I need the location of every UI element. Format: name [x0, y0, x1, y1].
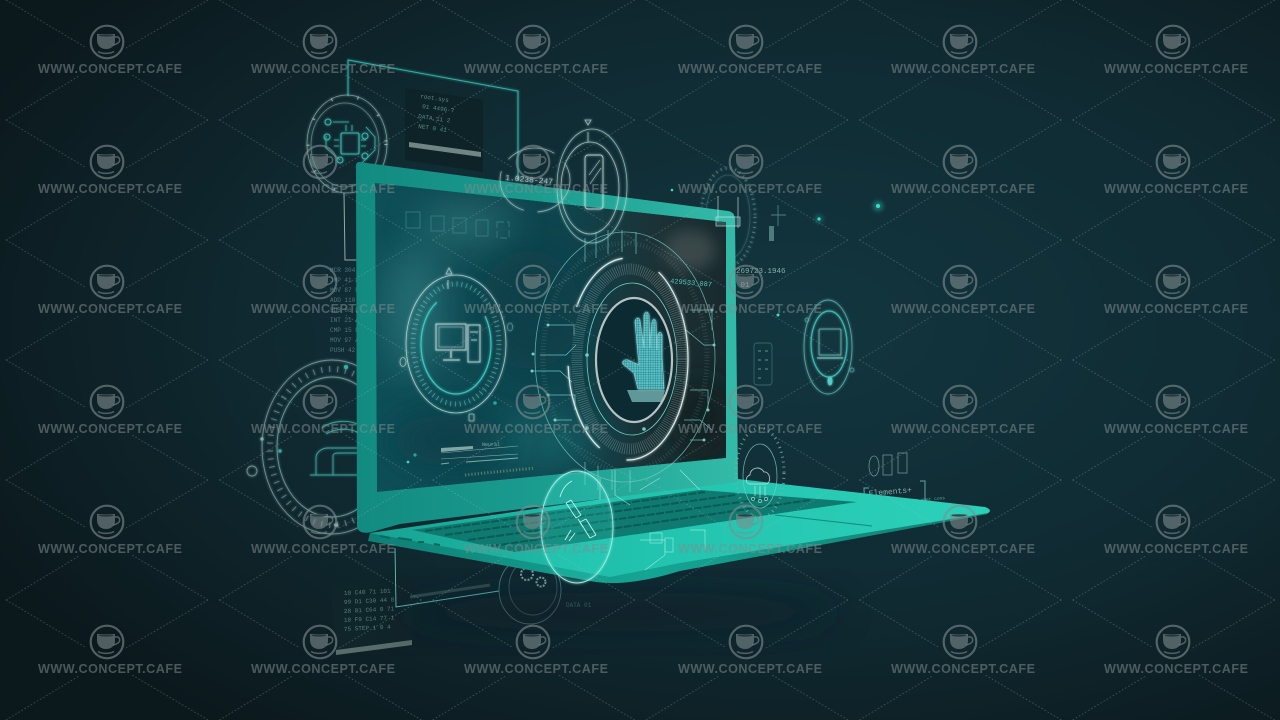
watermark grid: WWW.CONCEPT.CAFE — [38, 302, 182, 316]
watermark grid: WWW.CONCEPT.CAFE — [464, 62, 608, 76]
icon: floating plus and bar — [769, 205, 786, 241]
panel: lower code screen: 28 01 C64 0 71 — [344, 605, 395, 615]
watermark grid: WWW.CONCEPT.CAFE — [678, 182, 822, 196]
laptop — [356, 162, 990, 632]
icon: gears ring — [499, 556, 592, 624]
watermark grid: WWW.CONCEPT.CAFE — [1104, 182, 1248, 196]
laptop shadow — [400, 592, 840, 632]
trackpad line — [775, 515, 872, 526]
panel: top code screen: root.sys — [420, 93, 450, 104]
watermark grid: WWW.CONCEPT.CAFE — [678, 542, 822, 556]
watermark grid: WWW.CONCEPT.CAFE — [464, 542, 608, 556]
watermark grid: WWW.CONCEPT.CAFE — [38, 422, 182, 436]
text block: left code column: SUB 66 DX — [330, 307, 363, 314]
watermark grid: WWW.CONCEPT.CAFE — [891, 542, 1035, 556]
chart: progress bars on the screen — [407, 401, 535, 475]
text block: data readout: DATA 01 — [718, 282, 750, 290]
panel: lower code screen: 75 STEP 1 0 4 — [344, 624, 391, 633]
watermark grid: WWW.CONCEPT.CAFE — [251, 302, 395, 316]
watermark grid: WWW.CONCEPT.CAFE — [38, 662, 182, 676]
watermark grid: WWW.CONCEPT.CAFE — [38, 182, 182, 196]
watermark grid: WWW.CONCEPT.CAFE — [1104, 422, 1248, 436]
laptop base — [368, 479, 990, 583]
watermark grid: WWW.CONCEPT.CAFE — [891, 182, 1035, 196]
watermark grid: WWW.CONCEPT.CAFE — [251, 422, 395, 436]
panel: lower code screen: 99 D1 C30 44 8 — [344, 596, 395, 606]
text block: left code column: JMP 41 AL — [330, 277, 363, 284]
connector lines under the laptop — [395, 548, 499, 607]
watermark grid: WWW.CONCEPT.CAFE — [38, 62, 182, 76]
watermark grid: WWW.CONCEPT.CAFE — [891, 62, 1035, 76]
text block: elements card: Elements+ — [868, 486, 913, 499]
text block: left code column: MCR 304 — [330, 267, 356, 274]
glowing particles — [671, 189, 883, 316]
panel: top code screen: 01 4496 7 — [422, 103, 455, 115]
icon: scanned hand — [623, 312, 665, 402]
panel: top code screen — [348, 60, 518, 180]
watermark grid: WWW.CONCEPT.CAFE — [251, 62, 395, 76]
icon: keypad phone — [754, 343, 772, 385]
watermark grid: WWW.CONCEPT.CAFE — [1104, 542, 1248, 556]
watermark grid: WWW.CONCEPT.CAFE — [678, 422, 822, 436]
watermark grid: WWW.CONCEPT.CAFE — [464, 182, 608, 196]
watermark grid: WWW.CONCEPT.CAFE — [1104, 662, 1248, 676]
side ports — [380, 536, 440, 545]
panel: lower code screen: 10 C40 71 101 — [344, 588, 391, 597]
icon: cloud ring — [736, 428, 784, 518]
icon: router on the lid corner — [716, 196, 740, 228]
text block: hand scan code: 429533_087 — [670, 278, 712, 290]
icon row on the screen — [406, 212, 509, 238]
text block: left code column — [330, 267, 366, 354]
circuit traces on the keyboard — [600, 470, 705, 570]
watermark grid: WWW.CONCEPT.CAFE — [891, 422, 1035, 436]
icon: circuit chip ring — [307, 95, 387, 193]
chart: progress bars on the screen: Neural — [482, 442, 500, 448]
watermark grid: WWW.CONCEPT.CAFE — [464, 662, 608, 676]
icon: phone ring — [500, 120, 627, 243]
back HUD graphics behind the laptop — [247, 60, 945, 655]
text block: data readout: 847.269723.1946 — [718, 268, 786, 276]
icon: large left ring — [247, 360, 402, 534]
text block: elements card: Donec vitae mauris elit sed — [867, 502, 940, 514]
watermark grid: WWW.CONCEPT.CAFE — [678, 302, 822, 316]
watermark grid: WWW.CONCEPT.CAFE — [1104, 302, 1248, 316]
front HUD graphics on the screen — [400, 120, 784, 583]
panel: lower code screen — [331, 580, 415, 655]
text block: left code column: MOV 97 AH — [330, 337, 363, 344]
icon: outer circuit ring — [530, 230, 716, 492]
watermark grid: WWW.CONCEPT.CAFE — [251, 662, 395, 676]
white connector bracket — [344, 193, 358, 260]
icon: router ring top right — [701, 168, 755, 266]
text block: left code column: ADD 110 CL — [330, 297, 366, 304]
watermark grid: WWW.CONCEPT.CAFE — [251, 542, 395, 556]
keyboard — [412, 490, 857, 552]
watermark grid: WWW.CONCEPT.CAFE — [1104, 62, 1248, 76]
text block: left code column: PUSH 42 — [330, 347, 356, 354]
text block: elements card — [864, 453, 945, 518]
text block: data readout — [718, 268, 786, 290]
watermark grid: WWW.CONCEPT.CAFE — [891, 302, 1035, 316]
watermark grid: WWW.CONCEPT.CAFE — [464, 302, 608, 316]
icon: laptop ring on the right — [804, 300, 854, 394]
icon: hand scan rings — [568, 258, 688, 460]
watermark grid: WWW.CONCEPT.CAFE — [251, 182, 395, 196]
panel: top code screen: NET 0 41 — [418, 123, 448, 134]
laptop screen — [375, 183, 730, 492]
laptop lid — [356, 162, 738, 533]
icon: gears ring: DATA 01 — [566, 602, 592, 609]
text block: elements card: Lor ipsum dolor sit amet cons — [867, 495, 945, 508]
watermark grid: WWW.CONCEPT.CAFE — [38, 542, 182, 556]
text block: left code column: INT 21 AX — [330, 317, 363, 324]
text block: left code column: CMP 15 BL — [330, 327, 363, 334]
panel: top code screen: DATA 11 2 — [418, 113, 451, 125]
icon: satellite ring — [541, 471, 613, 583]
watermark grid: WWW.CONCEPT.CAFE — [678, 62, 822, 76]
icon: desktop computer ring — [400, 268, 513, 421]
watermark grid: WWW.CONCEPT.CAFE — [891, 662, 1035, 676]
text block: left code column: MOV 87 BX — [330, 287, 363, 294]
watermark grid: WWW.CONCEPT.CAFE — [464, 422, 608, 436]
panel: lower code screen: 10 F9 C14 77 1 — [344, 614, 395, 624]
watermark grid: WWW.CONCEPT.CAFE — [678, 662, 822, 676]
icon: phone ring: 1.0238-247 — [505, 174, 554, 187]
